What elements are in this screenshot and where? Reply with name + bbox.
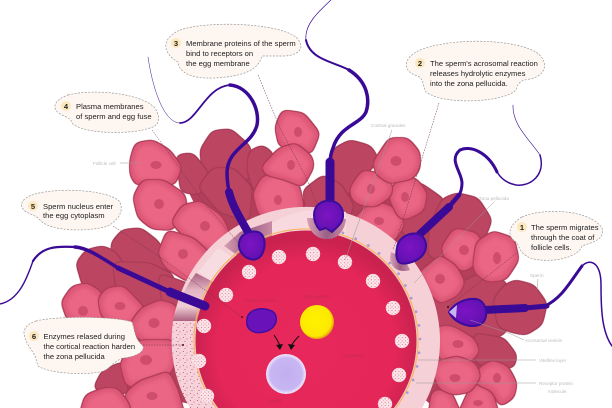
callout 4: of sperm and egg fuse [76,112,152,121]
label: cortical granules [345,123,406,260]
callout 5 [21,190,121,230]
label: vitelline layer: Vitelline layer [539,358,567,363]
label: sperm: Sperm [530,273,544,278]
callout 2: releases hydrolytic enzymes [430,69,526,78]
label: sperm [530,273,544,290]
label: acrosomal vesicle [470,320,562,343]
inner labels [245,294,365,403]
callout 1: follicle cells. [531,243,572,252]
callout 1: through the coat of [531,233,595,242]
callout 3: bind to receptors on [186,49,253,58]
leader lines [113,75,518,346]
lighter zona section top [272,210,346,243]
lighter zona section [198,248,237,283]
sperm nucleus [247,309,276,333]
follicle cells: light front layer [61,110,519,408]
zona sector at sperm 5 entry [173,273,215,321]
callout 5: Sperm nucleus enter [43,202,114,211]
callout 3 [166,24,301,78]
callout 6: Enzymes relased during [44,332,125,341]
callout 5: 5 [31,202,36,211]
arrow to zygote from sperm nucleus [274,335,283,350]
arrow to zygote from egg nucleus [288,336,299,350]
callout 6: the zona pellucida [44,352,105,361]
inner labels: Cytoplasm [343,353,365,358]
sperm 4 [148,57,265,260]
vitelline layer [194,229,418,408]
callout 3: Membrane proteins of the sperm [186,39,296,48]
callout 2: into the zona pellucida. [430,79,508,88]
inner labels: Egg nucleus [304,294,330,299]
zona sector at sperm 3 entry [307,218,346,239]
zona sector at sperm 4 entry [224,221,272,259]
callout 1: 1 [520,223,525,232]
cytoplasm [196,231,416,408]
label: acrosomal vesicle: Acrosomal vesicle [525,338,562,343]
zona pellucida ring [172,207,440,408]
sperm 1 [449,262,612,346]
callout 6: 6 [32,332,36,341]
label: follicle cell: Follicle cell [93,161,115,166]
egg nucleus [300,305,334,339]
label: zona pellucida: Zona pellucida [479,196,509,201]
cortical granules [192,247,409,408]
callout 6 [24,317,143,374]
inner labels: Sperm nucleus [245,298,276,303]
callout 2 [406,41,545,101]
callout 4: Plasma membranes [76,102,144,111]
callout 3: the egg membrane [186,59,250,68]
receptor protein molecules [342,232,421,394]
sperm 3 [306,0,368,232]
inner labels: Zygote [268,398,282,403]
follicle cells: dark back layer [76,129,547,404]
callout 2: The sperm's acrosomal reaction [430,59,538,68]
callout 4 [55,92,159,133]
sperm 5 [0,247,205,306]
callout 1 [510,211,603,260]
zona sector at sperm 2 entry [390,252,410,271]
label: receptor protein molecule: Receptor protein [539,381,573,386]
callout 3: 3 [174,39,178,48]
callout 6: the cortical reaction harden [44,342,135,351]
sperm 2 [396,105,541,264]
label: follicle cell [93,161,141,166]
callout 5: the egg cytoplasm [43,211,105,220]
label: receptor protein molecule [416,381,573,394]
label: receptor protein molecule: molecule [548,389,567,394]
hardened speckled zona section [172,321,216,408]
callout 1: The sperm migrates [531,223,599,232]
zygote nucleus [266,354,306,394]
label: cortical granules: Cortical granules [371,123,406,128]
callout 4: 4 [64,102,69,111]
callout 2: 2 [418,59,422,68]
label: zona pellucida [414,196,509,283]
